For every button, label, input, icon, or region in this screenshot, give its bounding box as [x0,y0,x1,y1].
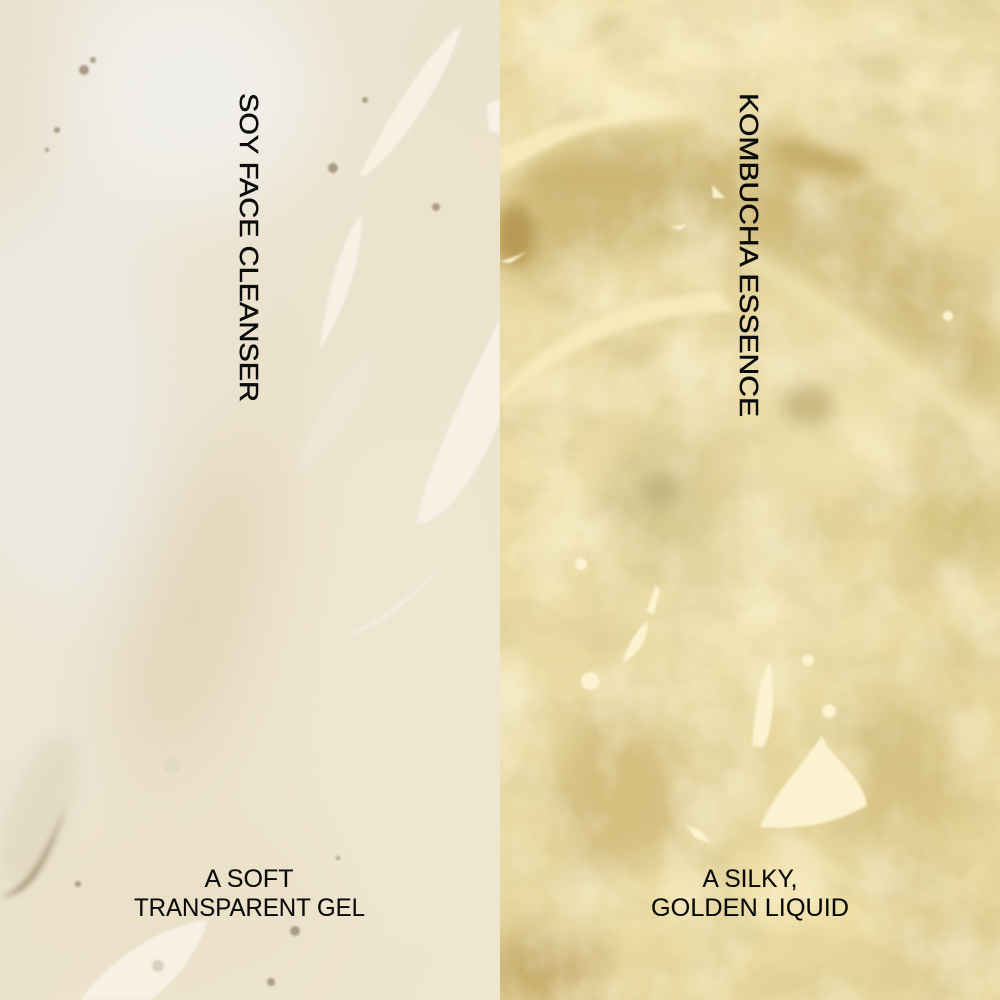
heading: kombucha essence: KOMBUCHA ESSENCE [734,93,764,417]
light ridges [500,292,735,405]
droplets [45,57,440,986]
caption: a soft transparent gel: A SOFT [204,865,294,893]
caption: a soft transparent gel [134,869,364,916]
caption: a silky golden liquid: GOLDEN LIQUID [651,894,849,922]
dark crease bottom left [0,806,66,897]
gold highlights [500,185,953,843]
caption: a silky golden liquid: A SILKY, [702,865,798,893]
heading: soy face cleanser: SOY FACE CLEANSER [234,93,264,402]
mottled liquid texture [500,0,1000,1000]
caption: a silky golden liquid [652,869,848,920]
panel: soy face cleanser gel texture [0,0,510,1000]
caption: a soft transparent gel: TRANSPARENT GEL [134,894,365,922]
glossy highlights [80,24,500,1000]
panel: kombucha essence liquid texture [480,0,1000,1000]
